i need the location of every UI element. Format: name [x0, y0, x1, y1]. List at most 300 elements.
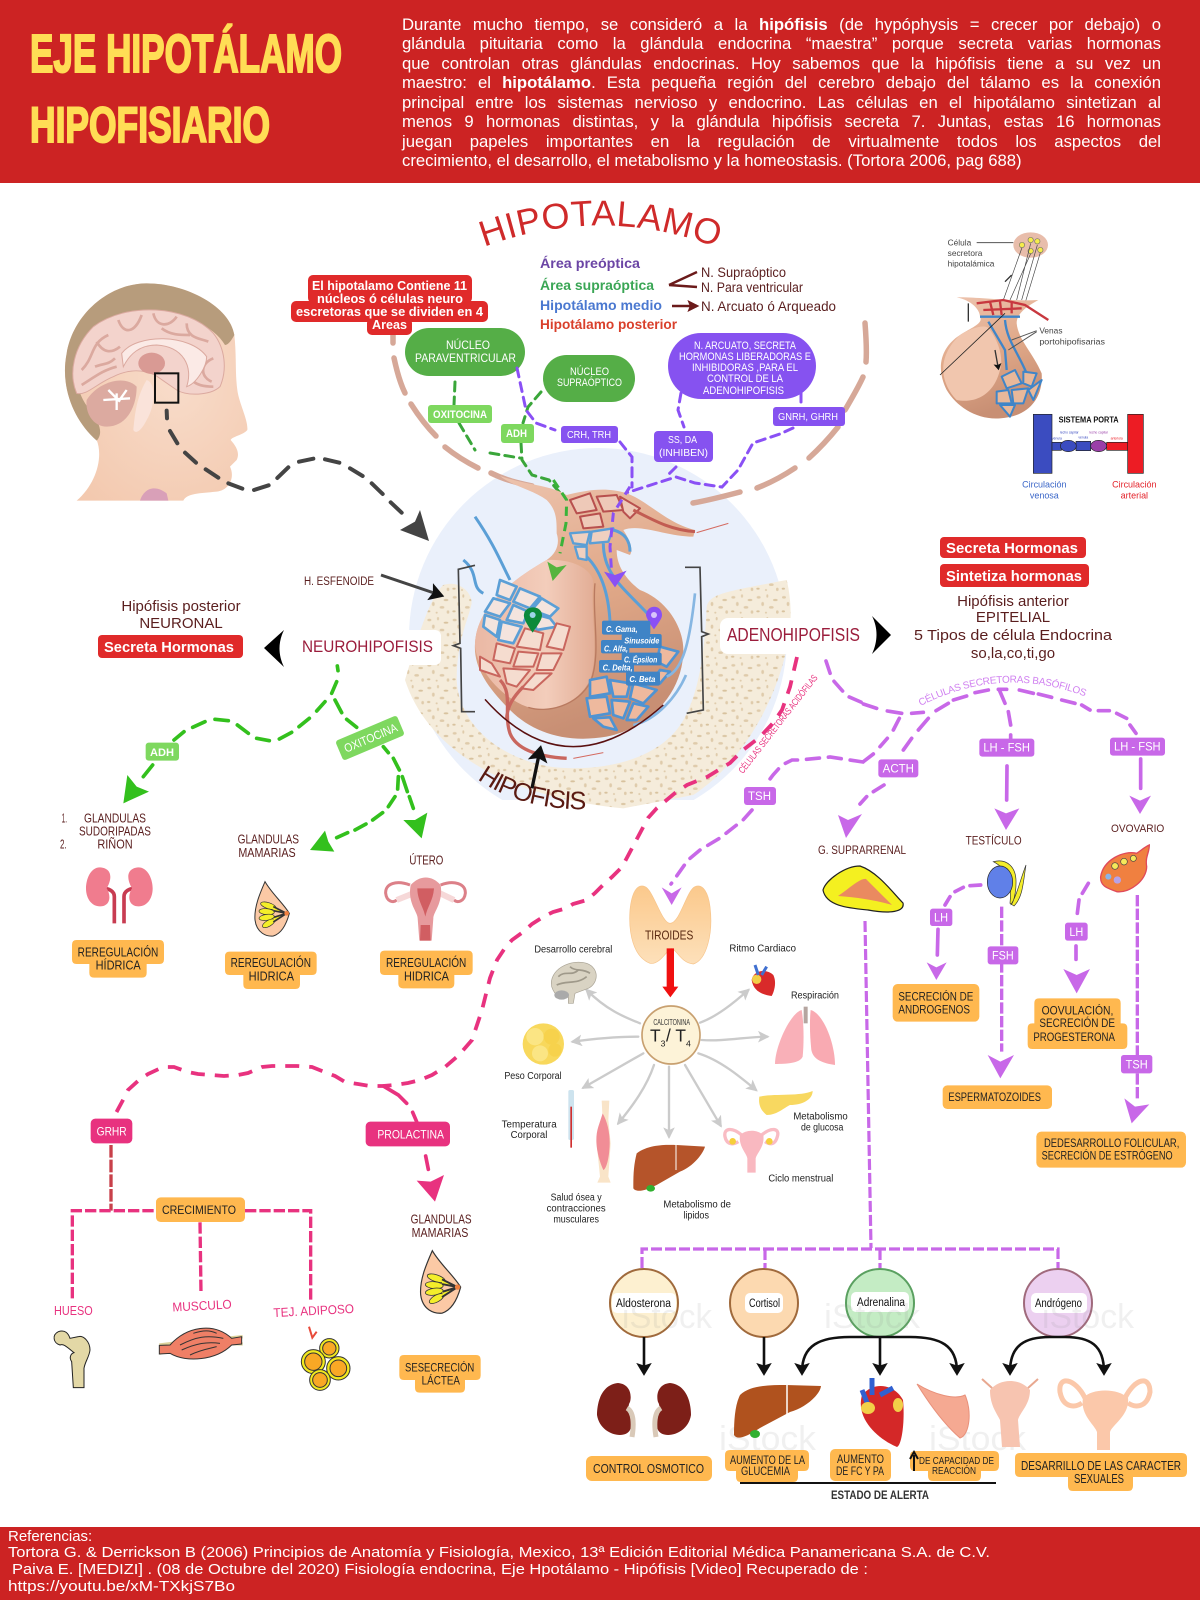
box: regulacion 1: REREGULACIÓN — [78, 944, 158, 959]
anterior capillaries — [587, 647, 678, 730]
hormone: adrenalina: Adrenalina — [857, 1297, 906, 1309]
organ effect labels: Salud ósea y — [551, 1192, 602, 1203]
organ effect labels: Desarrollo cerebral — [534, 944, 612, 955]
cell type labels: C. Épsilon — [624, 655, 657, 664]
dashed path to pituitary — [167, 411, 402, 513]
callout: 11 nucleos: Areas — [372, 317, 407, 332]
thyroid — [630, 886, 711, 964]
callout: 11 nucleos — [291, 275, 488, 335]
porta system: arteriola — [1111, 436, 1123, 440]
big dashed arc — [393, 323, 866, 503]
adrenal hormones panel — [586, 921, 1187, 1502]
arc label — [921, 683, 1090, 706]
label: esfenoide — [304, 575, 440, 595]
path to tsh and thyroid — [671, 757, 863, 884]
box: regulacion 2: REREGULACIÓN — [231, 955, 311, 970]
intro paragraph: glándula pituitaria como la glándula endocrina “maestra” porque secreta varias hormonas — [402, 34, 1161, 53]
arrowheads — [927, 796, 1151, 1123]
box: regulacion 2: HIDRICA — [249, 969, 294, 983]
purple arrowhead — [662, 887, 682, 905]
pituitary illustration: HIPOFISIS — [478, 766, 586, 810]
arrowhead to adrenal — [838, 814, 862, 838]
thyroid panel — [502, 886, 848, 1225]
tag: lh-fsh — [979, 739, 1034, 757]
box: regulacion 3 — [380, 951, 473, 988]
text: utero: ÚTERO — [409, 853, 443, 868]
references footer: https://youtu.be/xM-TXkjS7Bo — [8, 1578, 235, 1595]
icon: muscle bone — [596, 1101, 611, 1183]
icon: testis — [987, 861, 1026, 906]
porta system: arterial — [1121, 491, 1148, 501]
central circle — [409, 448, 787, 826]
nucleus: supraoptico: SUPRAÓPTICO — [557, 376, 622, 389]
organ effect labels: Temperatura — [502, 1119, 557, 1130]
intro paragraph: Durante mucho tiempo, se consideró a la hipófisis (de hypóphysis = crecer por debajo) o — [402, 15, 1161, 34]
box: ovulacion — [1028, 998, 1127, 1049]
tag: fsh — [988, 946, 1018, 964]
box: lactea — [399, 1355, 481, 1393]
box: ovulacion: OOVULACIÓN, — [1042, 1002, 1113, 1017]
purple dashed lines — [517, 368, 801, 493]
portal diagram: secretora — [948, 248, 983, 258]
cerebellum — [86, 380, 137, 427]
hormone node: 3 — [661, 1039, 666, 1049]
hormone node: T — [675, 1026, 686, 1046]
tag: lh-fsh: LH - FSH — [983, 742, 1030, 755]
callout: 11 nucleos: escretoras que se dividen en 4 — [296, 304, 484, 319]
tag: ss da — [654, 431, 713, 462]
icon: heart — [861, 1378, 904, 1447]
portal diagram — [940, 232, 1157, 501]
icon: muscle — [917, 1384, 969, 1438]
text: glandulas mamarias: GLANDULAS — [238, 833, 299, 847]
box: glucemia: AUMENTO DE LA — [730, 1455, 805, 1467]
icon: brain — [551, 962, 596, 1003]
title: HIPOFISIARIO — [30, 97, 270, 153]
magnified region square — [155, 373, 178, 403]
tag: oxitocina: OXITOCINA — [342, 721, 400, 756]
label: musculo: MUSCULO — [172, 1297, 232, 1315]
text: targets: GLANDULAS — [84, 811, 146, 825]
tag: adh — [501, 424, 534, 443]
tag: oxitocina — [428, 405, 492, 423]
label: tejido adiposo: TEJ. ADIPOSO — [273, 1302, 354, 1320]
cell type labels: Sinusoide — [624, 636, 660, 645]
organ effect labels: Respiración — [791, 990, 839, 1001]
tag: ss da: (INHIBEN) — [659, 448, 708, 459]
label: neurohipofisis — [295, 630, 441, 665]
label: tiroides: TIROIDES — [645, 928, 693, 942]
box: ovulacion: SECRECIÓN DE — [1039, 1015, 1115, 1030]
watermark: iStock — [1042, 1298, 1135, 1336]
icon: uterus — [1060, 1381, 1150, 1450]
icon: liver — [633, 1145, 705, 1192]
tag: fsh: FSH — [992, 950, 1014, 963]
text: targets: 2. — [60, 838, 67, 852]
label: neurohipofisis: NEUROHIPOFISIS — [302, 637, 433, 656]
nuclei list — [701, 265, 836, 314]
icon: uterus — [725, 1130, 778, 1173]
arrowhead — [310, 831, 334, 852]
label: adenohipofisis — [720, 618, 870, 654]
first segment from adenohipofisis — [826, 661, 863, 703]
brown arc — [485, 699, 663, 747]
arrow: black right — [872, 616, 891, 654]
box: control osmotico: CONTROL OSMOTICO — [593, 1462, 704, 1476]
tag: crh trh: CRH, TRH — [567, 430, 611, 441]
tag: gnrh ghrh: GNRH, GHRH — [778, 412, 838, 423]
bone — [405, 580, 791, 808]
tag: lh: LH — [934, 912, 948, 925]
watermark: iStock — [622, 1298, 713, 1336]
box: regulacion 1: HÍDRICA — [96, 958, 141, 973]
text: hipofisis posterior: Secreta Hormonas — [104, 639, 234, 656]
small red arrow — [309, 1327, 317, 1338]
icon: breast — [255, 882, 289, 936]
organ effect labels: contracciones — [547, 1203, 606, 1214]
black arrows — [644, 1337, 1104, 1372]
porta system: vénula — [1052, 436, 1062, 440]
text: hipofisis anterior: so,la,co,ti,go — [971, 645, 1055, 662]
hormone node: / — [666, 1026, 671, 1046]
label: ovario: OVOVARIO — [1111, 823, 1164, 835]
box: capacidad de reaccion: DE CAPACIDAD DE — [919, 1455, 994, 1467]
box: androgenos: SECRECIÓN DE — [898, 988, 973, 1003]
tag: tsh — [744, 787, 776, 805]
tag: lh: LH — [1069, 926, 1083, 939]
connector — [642, 921, 1058, 1268]
hormone: cortisol: Cortisol — [749, 1298, 780, 1310]
porta system: lecho capilar — [1060, 431, 1080, 435]
icon: kidneys — [86, 867, 153, 923]
references footer: Referencias: — [8, 1528, 92, 1545]
text: targets — [60, 811, 151, 852]
portal diagram: hipotalámica — [948, 259, 995, 269]
box: androgenos: ANDROGENOS — [898, 1002, 970, 1016]
porta system: SISTEMA PORTA — [1059, 415, 1119, 424]
title — [30, 24, 342, 153]
references footer: Tortora G. & Derrickson B (2006) Principios de Anatomía y Fisiología, Mexico, 13ª Edición Editorial Médica Panamericana S.A. de C.V. — [8, 1544, 990, 1561]
nucleus: paraventricular: PARAVENTRICULAR — [415, 351, 516, 365]
cell type labels: C. Beta — [629, 675, 656, 684]
porta system: Circulación — [1112, 479, 1157, 489]
text: hipofisis posterior: NEURONAL — [139, 615, 223, 632]
nucleus: supraoptico — [543, 355, 635, 402]
arrowhead — [123, 775, 149, 803]
intro paragraph: menos 9 hormonas distintas, y la glándula hipófisis secreta 7. Juntas, estas 16 hormonas — [402, 112, 1161, 131]
cell type labels: C. Gama, — [606, 625, 638, 634]
organ effect labels: Metabolismo de — [663, 1200, 731, 1211]
nucleus: arcuato: HORMONAS LIBERADORAS E — [679, 351, 811, 363]
label: g suprarrenal: G. SUPRARRENAL — [818, 843, 906, 857]
icon: male — [982, 1379, 1038, 1447]
blue capillary net stalk — [570, 528, 613, 560]
intro paragraph: juegan papeles importantes en la regulación de virtualmente todos los aspectos del — [402, 132, 1161, 151]
text: hipofisis anterior: Secreta Hormonas — [946, 541, 1078, 557]
icon: liver — [734, 1385, 821, 1438]
tag: grhr: GRHR — [97, 1124, 127, 1138]
cell type labels: C. Delta, — [603, 664, 633, 673]
nuclei list: N. Para ventricular — [701, 280, 803, 295]
watermark: iStock — [824, 1298, 921, 1336]
hormone: androgeno — [1024, 1269, 1092, 1337]
area list: Área supraóptica — [540, 277, 654, 293]
text: hipofisis anterior: 5 Tipos de célula Endocrina — [914, 627, 1113, 644]
box: androgenos — [893, 984, 979, 1022]
organ effect labels: Ritmo Cardiaco — [729, 943, 796, 954]
text: targets: SUDORIPADAS — [79, 824, 151, 838]
icon: adipose cells — [301, 1339, 350, 1390]
box: regulacion 2 — [225, 952, 317, 989]
box: regulacion 1 — [72, 940, 164, 978]
organ effect labels: lipidos — [683, 1211, 709, 1222]
title: EJE HIPOTÁLAMO — [30, 24, 342, 84]
text: glandulas mamarias — [411, 1213, 472, 1240]
text: glandulas mamarias: MAMARIAS — [412, 1226, 468, 1240]
tag: acth — [878, 759, 918, 777]
hormone: adrenalina — [846, 1269, 914, 1337]
hormone node: T — [650, 1026, 661, 1046]
header band — [0, 0, 1200, 183]
label: hueso: HUESO — [54, 1304, 93, 1318]
tag: lh — [1065, 923, 1088, 941]
organ effect labels: de glucosa — [801, 1122, 844, 1133]
label: testiculo: TESTÍCULO — [966, 833, 1022, 848]
label: esfenoide: H. ESFENOIDE — [304, 576, 374, 588]
head illustration — [65, 283, 402, 513]
neurohypophysis branch — [60, 666, 473, 989]
porta system: venosa — [1030, 491, 1059, 501]
intro paragraph — [402, 15, 1161, 170]
box: regulacion 3: HIDRICA — [404, 969, 449, 983]
nucleus: paraventricular — [405, 328, 525, 376]
box: control osmotico — [586, 1456, 712, 1481]
arrowhead — [417, 1175, 444, 1202]
text: hipofisis posterior — [98, 598, 243, 658]
hormone: cortisol — [730, 1269, 798, 1337]
box: desarrollo — [1015, 1453, 1187, 1491]
gland — [941, 297, 1042, 418]
red artery tip — [573, 523, 728, 758]
tag: acth: ACTH — [883, 762, 914, 775]
porta system: Circulación — [1022, 479, 1067, 489]
nuclei list: N. Arcuato ó Arqueado — [701, 299, 836, 314]
label: hipofisis — [477, 779, 588, 809]
porta system: lecho capilar — [1089, 431, 1109, 435]
text: targets: 1. — [62, 811, 67, 825]
text: hipofisis anterior: Hipófisis anterior — [957, 593, 1069, 610]
box: crecimiento: CRECIMIENTO — [162, 1203, 236, 1217]
dashed arrows into gland — [553, 480, 567, 553]
nucleus: supraoptico: NÚCLEO — [570, 365, 609, 378]
area list — [540, 255, 678, 332]
nucleus: arcuato: CONTROL DE LA — [707, 373, 784, 385]
text: hipofisis anterior — [914, 537, 1113, 662]
watermark — [622, 1298, 1135, 1458]
arrowhead: purple — [604, 571, 627, 587]
cell type labels: C. Alfa, — [604, 645, 628, 654]
tag: adh — [146, 743, 179, 761]
icon: pancreas — [759, 1091, 813, 1115]
organ effect labels: musculares — [553, 1214, 599, 1225]
area list: Hipotálamo medio — [540, 297, 662, 313]
portal diagram: Venas — [1039, 325, 1062, 335]
label: celulas acidofilas: CÉLULAS SECRETORAS ACIDÓFILAS — [737, 673, 820, 776]
area list: Área preóptica — [540, 255, 640, 271]
brain — [73, 310, 224, 394]
box: capacidad de reaccion: REACCIÓN — [932, 1464, 976, 1477]
organ effect labels: Metabolismo — [793, 1111, 848, 1122]
connector lines — [106, 1145, 116, 1211]
red arrow — [662, 948, 678, 997]
tag: ss da: SS, DA — [668, 435, 697, 446]
tag: lh-fsh: LH - FSH — [1114, 741, 1161, 754]
basophil branch — [858, 676, 1186, 1168]
hypothalamus arc — [291, 200, 870, 506]
box: espermatozoides — [943, 1085, 1052, 1109]
nuclei list: N. Supraóptico — [701, 265, 786, 280]
tag: tsh: TSH — [748, 791, 771, 803]
arrow: to hipofisis — [532, 750, 540, 788]
green dashed arrows — [143, 666, 413, 838]
box: capacidad de reaccion — [910, 1451, 999, 1481]
icon: lungs — [775, 1007, 835, 1065]
icon: kidneys dark — [597, 1383, 691, 1437]
hormone: androgeno: Andrógeno — [1035, 1298, 1082, 1310]
pin: purple — [646, 607, 662, 629]
intro paragraph: crecimiento, el desarrollo, el metabolismo y la homeostasis. (Tortora 2006, pag 688) — [402, 151, 1022, 170]
text: targets: RIÑON — [97, 838, 133, 852]
box: ovulacion: PROGESTERONA — [1033, 1030, 1115, 1044]
references footer: Paiva E. [MEDIZI] . (08 de Octubre del 2020) Fisiología endocrina, Eje Hpotálamo - Hipófisis [Video] Recuperado de : — [12, 1561, 868, 1578]
icon: thermometer — [568, 1090, 574, 1148]
red capillary net stalk — [570, 493, 640, 528]
box: desarrollo: SEXUALES — [1074, 1472, 1124, 1486]
tag: tsh: TSH — [1126, 1059, 1148, 1072]
box: fc pa: AUMENTO — [837, 1454, 884, 1466]
text: glandulas mamarias: GLANDULAS — [411, 1213, 472, 1227]
gland — [475, 476, 695, 739]
porta system: vénula — [1078, 436, 1088, 440]
icon: ovary — [1101, 845, 1149, 892]
hormone: aldosterona — [610, 1269, 678, 1337]
intro paragraph: principal entre los sistemas nervioso y endocrino. Las células en el hipotálamo sintetizan al — [402, 93, 1161, 112]
tag: lh — [930, 909, 952, 926]
area list: Hipotálamo posterior — [540, 316, 678, 332]
icon: breast — [421, 1251, 461, 1313]
tag: lh-fsh — [1110, 738, 1165, 756]
hormone node: 4 — [686, 1039, 691, 1049]
arrow: black left — [264, 630, 284, 667]
tag: oxitocina: OXITOCINA — [433, 409, 487, 421]
box: espermatozoides: ESPERMATOZOIDES — [948, 1090, 1041, 1104]
brackets — [453, 565, 708, 713]
basophil branch: CÉLULAS SECRETORAS BASÓFILOS — [919, 676, 1086, 705]
text: hipofisis posterior: Hipófisis posterior — [121, 598, 241, 615]
nucleus: arcuato: N. ARCUATO, SECRETA — [694, 340, 797, 352]
hypothalamic cell — [1013, 232, 1048, 258]
tag: gnrh ghrh — [773, 407, 845, 426]
text: hipofisis anterior: Sintetiza hormonas — [946, 569, 1082, 585]
organ effect labels: Ciclo menstrual — [768, 1174, 833, 1185]
acidophil tree — [54, 1086, 481, 1393]
arrowhead — [403, 813, 427, 838]
references footer — [0, 1527, 1200, 1600]
label: adenohipofisis: ADENOHIPOFISIS — [727, 625, 860, 645]
posterior capillaries — [483, 580, 558, 643]
box: fc pa: DE FC Y PA — [836, 1466, 884, 1478]
intro paragraph: maestro: el hipotálamo. Esta pequeña región del cerebro debajo del tálamo es la conexión — [402, 73, 1161, 92]
icon: bone — [54, 1331, 90, 1388]
box: regulacion 3: REREGULACIÓN — [386, 955, 466, 970]
text: glandulas mamarias: MAMARIAS — [238, 846, 296, 860]
arrowhead: dark from head — [400, 510, 429, 541]
dashed network — [860, 689, 1141, 959]
icon: fat — [523, 1023, 564, 1065]
icon: muscle — [159, 1328, 243, 1359]
pituitary illustration — [400, 476, 791, 810]
hormone node — [642, 1006, 700, 1064]
tag: tsh — [1121, 1055, 1152, 1073]
nucleus: arcuato — [668, 333, 816, 399]
box: lactea: SESECRECIÓN — [405, 1359, 474, 1374]
text: hipofisis anterior: EPITELIAL — [976, 609, 1050, 626]
text: glandulas mamarias — [238, 833, 299, 860]
portal diagram: Célula — [948, 237, 972, 247]
tag: adh: ADH — [150, 747, 174, 759]
watermark: iStock — [929, 1420, 1027, 1458]
hair — [65, 283, 234, 441]
acidophil pink path — [116, 657, 797, 1113]
tag: crh trh — [561, 426, 618, 443]
organ effect labels — [502, 943, 848, 1225]
arrowhead: green — [547, 562, 567, 581]
callout: 11 nucleos: El hipotalamo Contiene 11 — [312, 278, 467, 293]
tag: grhr — [91, 1119, 132, 1143]
pin: green — [524, 607, 542, 633]
radial arrows — [573, 990, 767, 1137]
box: glucemia: GLUCEMIA — [741, 1466, 790, 1478]
icon: uterus — [386, 877, 465, 941]
box: crecimiento — [156, 1197, 245, 1222]
area arrows — [669, 272, 697, 306]
green dashed lines — [454, 382, 566, 500]
title: hipotalamo — [484, 226, 716, 247]
portal diagram: portohipofisarias — [1039, 336, 1105, 346]
hormone: aldosterona: Aldosterona — [616, 1298, 672, 1310]
nucleus: arcuato: INHIBIDORAS ,PARA EL — [692, 362, 798, 374]
organ effect labels: Peso Corporal — [504, 1071, 562, 1082]
hypothalamus arc: HIPOTALAMO — [479, 200, 720, 246]
nucleus: paraventricular: NÚCLEO — [446, 337, 490, 352]
cell type labels — [599, 621, 662, 686]
callout: 11 nucleos: núcleos ó células neuro — [317, 291, 463, 306]
box: folicular — [1036, 1132, 1186, 1168]
organ effect labels: Corporal — [511, 1130, 547, 1141]
tag: adh: ADH — [506, 428, 527, 440]
box: lactea: LÁCTEA — [422, 1373, 461, 1388]
hormone node: CALCITONINA — [653, 1017, 690, 1027]
porta system — [1022, 414, 1157, 501]
box: glucemia — [725, 1450, 809, 1482]
estado de alerta: ESTADO DE ALERTA — [831, 1488, 929, 1502]
brainstem — [133, 380, 154, 432]
icon: heart — [752, 965, 775, 996]
tag: prolactina: PROLACTINA — [377, 1127, 444, 1141]
icon: adrenal — [823, 866, 903, 912]
tag: prolactina — [366, 1122, 450, 1146]
watermark: iStock — [719, 1420, 817, 1458]
